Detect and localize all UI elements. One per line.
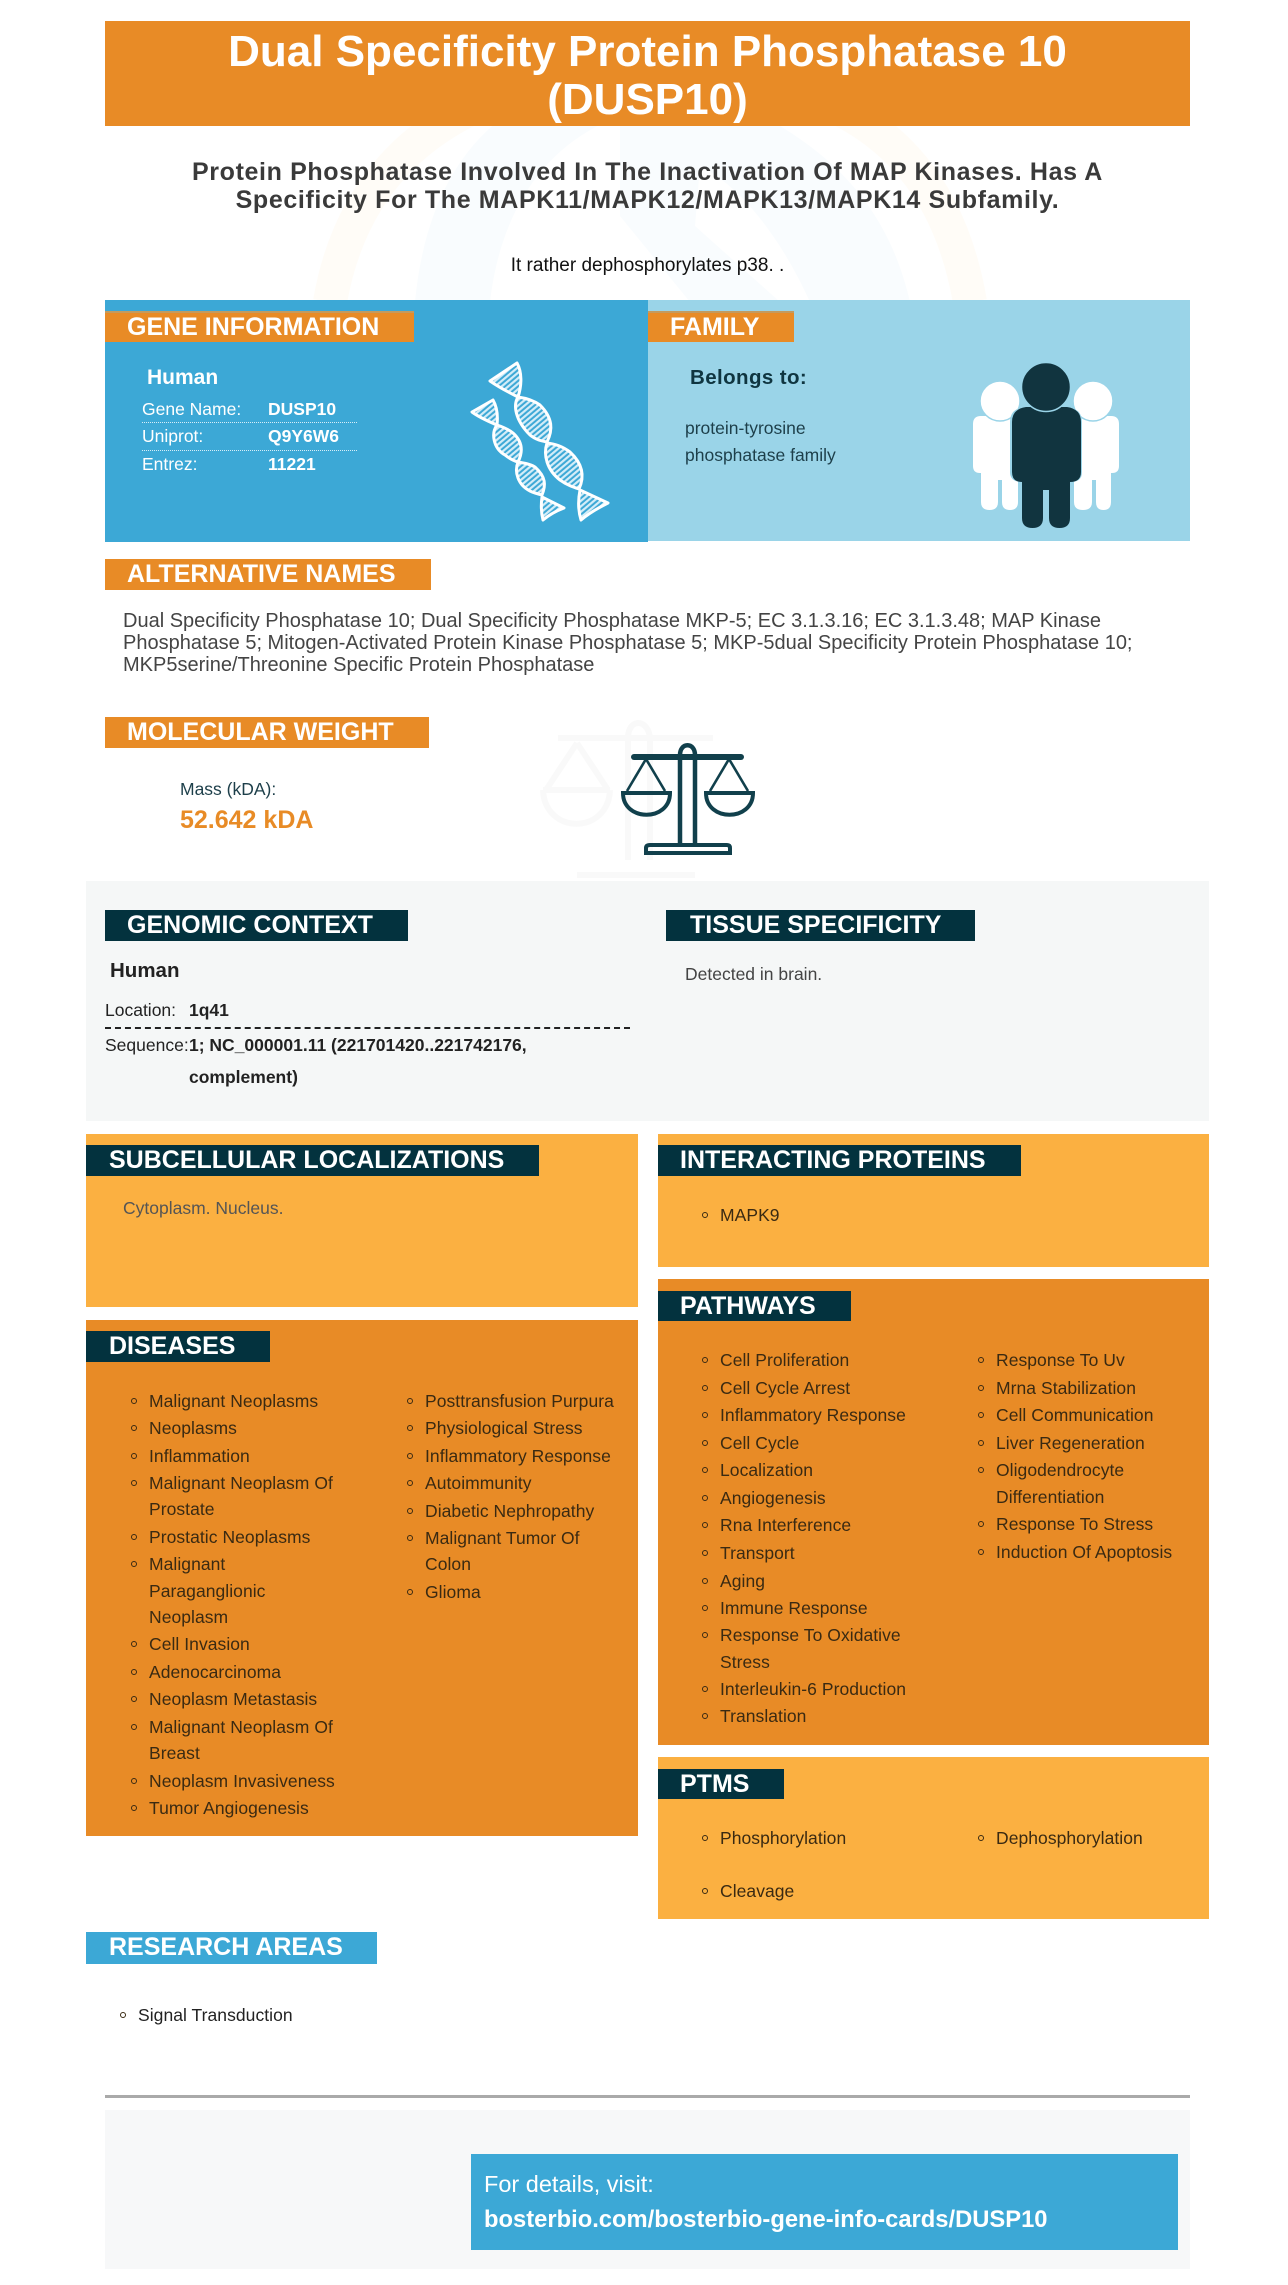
family name: protein-tyrosine xyxy=(685,418,806,438)
pathway list: Stress xyxy=(720,1652,770,1672)
family name: phosphatase family xyxy=(685,445,836,465)
entrez row: Entrez: xyxy=(142,454,197,474)
disease list: Physiological Stress xyxy=(425,1418,583,1438)
disease list: Diabetic Nephropathy xyxy=(425,1501,594,1521)
panel: genomic context and tissue specificity: 1q41 xyxy=(189,1000,229,1020)
disease list: Neoplasm xyxy=(149,1607,228,1627)
pathway list: Localization xyxy=(720,1460,813,1480)
pathway list: Cell Communication xyxy=(996,1405,1154,1425)
pathway list: Mrna Stabilization xyxy=(996,1378,1136,1398)
icon: group of people xyxy=(973,363,1119,528)
heading: gene information: GENE INFORMATION xyxy=(127,313,379,341)
disease list: Prostate xyxy=(149,1499,215,1519)
PTM list: Dephosphorylation xyxy=(996,1828,1143,1848)
gene name row xyxy=(142,398,357,423)
disease list: Inflammation xyxy=(149,1446,250,1466)
heading: alternative names: ALTERNATIVE NAMES xyxy=(127,560,396,588)
sequence value: complement) xyxy=(189,1067,298,1087)
pathway list: Translation xyxy=(720,1706,806,1726)
heading: subcellular localizations: SUBCELLULAR LOCALIZATIONS xyxy=(109,1146,504,1174)
heading: family xyxy=(648,311,794,342)
localization text: Cytoplasm. Nucleus. xyxy=(123,1198,283,1218)
title: (DUSP10) xyxy=(547,75,748,124)
heading: research areas: RESEARCH AREAS xyxy=(109,1933,343,1961)
tissue text: Detected in brain. xyxy=(685,964,822,984)
gene name row: Gene Name: xyxy=(142,399,241,419)
pathway list: Oligodendrocyte xyxy=(996,1460,1124,1480)
panel: footer xyxy=(105,2110,1190,2269)
disease list: Malignant Neoplasms xyxy=(149,1391,318,1411)
pathway list: Induction Of Apoptosis xyxy=(996,1542,1172,1562)
background watermark xyxy=(300,126,1000,302)
disease list: Neoplasm Metastasis xyxy=(149,1689,317,1709)
PTM list xyxy=(702,1828,1143,1901)
heading: family: FAMILY xyxy=(670,313,759,341)
panel: interacting proteins xyxy=(658,1134,1209,1267)
pathway list: Cell Cycle Arrest xyxy=(720,1378,850,1398)
pathway list: Cell Proliferation xyxy=(720,1350,849,1370)
belongs to: Belongs to: xyxy=(690,366,807,389)
heading: tissue specificity: TISSUE SPECIFICITY xyxy=(690,911,941,939)
pathway list: Differentiation xyxy=(996,1487,1104,1507)
disease list: Paraganglionic xyxy=(149,1581,265,1601)
pathway list: Response To Oxidative xyxy=(720,1625,901,1645)
panel: gene information xyxy=(105,300,648,542)
icon: DNA double helix xyxy=(470,361,610,522)
disease list: Breast xyxy=(149,1743,200,1763)
sequence value: 1; NC_000001.11 (221701420..221742176, xyxy=(189,1035,527,1055)
pathway list: Angiogenesis xyxy=(720,1488,826,1508)
heading: pathways: PATHWAYS xyxy=(680,1292,816,1320)
protein list: MAPK9 xyxy=(720,1205,780,1225)
heading: diseases: DISEASES xyxy=(109,1332,235,1360)
description: It rather dephosphorylates p38. . xyxy=(511,255,784,276)
pathway list: Inflammatory Response xyxy=(720,1405,906,1425)
subtitle: Protein Phosphatase Involved In The Inactivation Of MAP Kinases. Has A xyxy=(192,158,1103,186)
location row xyxy=(105,1000,229,1020)
disease list: Malignant xyxy=(149,1554,225,1574)
disease list: Malignant Neoplasm Of xyxy=(149,1473,333,1493)
subtitle xyxy=(192,158,1103,214)
heading: diseases xyxy=(86,1331,270,1362)
disease list: Adenocarcinoma xyxy=(149,1662,281,1682)
uniprot row: Q9Y6W6 xyxy=(268,426,339,446)
alternative names text: Phosphatase 5; Mitogen-Activated Protein Kinase Phosphatase 5; MKP-5dual Specificity Protein Phosphatase 10; xyxy=(123,632,1132,654)
heading: PTMs: PTMS xyxy=(680,1770,749,1798)
entrez row xyxy=(142,454,316,474)
research area list: Signal Transduction xyxy=(138,2005,293,2025)
divider xyxy=(105,2095,1190,2098)
sequence value xyxy=(189,1035,527,1087)
callout: details link xyxy=(471,2154,1178,2250)
panel: family xyxy=(648,300,1190,541)
PTM list: Phosphorylation xyxy=(720,1828,846,1848)
PTM list: Cleavage xyxy=(720,1881,794,1901)
disease list: Malignant Neoplasm Of xyxy=(149,1717,333,1737)
heading: pathways xyxy=(658,1291,851,1321)
pathway list: Response To Stress xyxy=(996,1514,1153,1534)
mass value: 52.642 kDA xyxy=(180,806,313,834)
alternative names text: Dual Specificity Phosphatase 10; Dual Specificity Phosphatase MKP-5; EC 3.1.3.16; EC 3.1.3.48; MAP Kinase xyxy=(123,610,1101,632)
title: Dual Specificity Protein Phosphatase 10 xyxy=(228,27,1067,76)
disease list: Prostatic Neoplasms xyxy=(149,1527,310,1547)
gene name row: DUSP10 xyxy=(268,399,336,419)
panel: diseases xyxy=(86,1320,638,1836)
disease list: Malignant Tumor Of xyxy=(425,1528,580,1548)
sequence row: Sequence: xyxy=(105,1035,189,1055)
callout label: For details, visit: xyxy=(484,2171,654,2197)
pathway list: Cell Cycle xyxy=(720,1433,799,1453)
pathway list: Immune Response xyxy=(720,1598,868,1618)
panel: pathways xyxy=(658,1279,1209,1745)
icon: balance scale xyxy=(621,743,755,855)
panel: subcellular localizations xyxy=(86,1134,638,1307)
uniprot row xyxy=(142,425,357,451)
callout url: bosterbio.com/bosterbio-gene-info-cards/DUSP10 xyxy=(484,2206,1047,2233)
disease list: Neoplasm Invasiveness xyxy=(149,1771,335,1791)
disease list xyxy=(131,1391,614,1818)
disease list: Colon xyxy=(425,1554,471,1574)
pathway list: Response To Uv xyxy=(996,1350,1125,1370)
title xyxy=(105,21,1190,126)
heading: interacting proteins: INTERACTING PROTEINS xyxy=(680,1146,986,1174)
disease list: Tumor Angiogenesis xyxy=(149,1798,309,1818)
disease list: Posttransfusion Purpura xyxy=(425,1391,614,1411)
pathway list: Rna Interference xyxy=(720,1515,851,1535)
disease list: Autoimmunity xyxy=(425,1473,532,1493)
family name xyxy=(685,418,836,465)
uniprot row: Uniprot: xyxy=(142,426,203,446)
pathway list: Interleukin-6 Production xyxy=(720,1679,906,1699)
pathway list: Aging xyxy=(720,1571,765,1591)
subtitle: Specificity For The MAPK11/MAPK12/MAPK13/MAPK14 Subfamily. xyxy=(236,186,1059,214)
disease list: Inflammatory Response xyxy=(425,1446,611,1466)
pathway list: Liver Regeneration xyxy=(996,1433,1145,1453)
alternative names text: MKP5serine/Threonine Specific Protein Phosphatase xyxy=(123,654,594,676)
panel: genomic context and tissue specificity xyxy=(86,881,1209,1121)
location row: Location: xyxy=(105,1000,176,1020)
heading: genomic context: GENOMIC CONTEXT xyxy=(127,911,373,939)
dashed separator xyxy=(105,1027,630,1029)
panel: PTMs xyxy=(658,1757,1209,1919)
disease list: Cell Invasion xyxy=(149,1634,250,1654)
pathway list: Transport xyxy=(720,1543,795,1563)
icon: faint scale watermark xyxy=(535,715,735,885)
heading: molecular weight: MOLECULAR WEIGHT xyxy=(127,718,394,746)
disease list: Neoplasms xyxy=(149,1418,237,1438)
heading: PTMs xyxy=(658,1769,784,1799)
mass label: Mass (kDA): xyxy=(180,779,276,799)
disease list: Glioma xyxy=(425,1582,481,1602)
species: Human xyxy=(110,959,179,982)
pathway list xyxy=(702,1350,1172,1726)
entrez row: 11221 xyxy=(268,454,316,474)
species: Human xyxy=(147,366,218,389)
alternative names text xyxy=(123,610,1132,676)
